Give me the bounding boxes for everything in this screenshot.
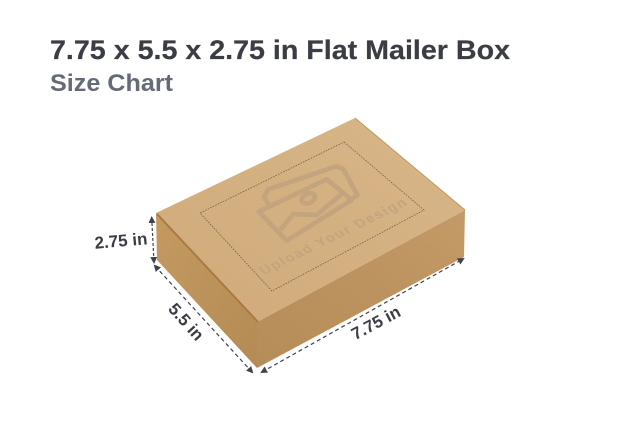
- box top: [156, 118, 465, 322]
- mailer box: [156, 118, 465, 368]
- upload your design text: Upload Your Design: [255, 195, 410, 277]
- height label: 2.75 in: [94, 229, 148, 253]
- height arrow: [152, 218, 154, 262]
- box left side: [156, 213, 257, 368]
- length arrow: [262, 259, 463, 372]
- box front side: [257, 210, 465, 368]
- width label: 5.5 in: [164, 299, 208, 345]
- box back edge: [355, 118, 465, 210]
- subtitle: Size Chart: [50, 70, 173, 97]
- box lid edge: [157, 214, 258, 322]
- width arrow: [155, 266, 252, 372]
- icon: image placeholder: [259, 166, 357, 241]
- title: 7.75 x 5.5 x 2.75 in Flat Mailer Box: [50, 35, 510, 65]
- dashed print area: [200, 142, 424, 291]
- length label: 7.75 in: [348, 302, 404, 344]
